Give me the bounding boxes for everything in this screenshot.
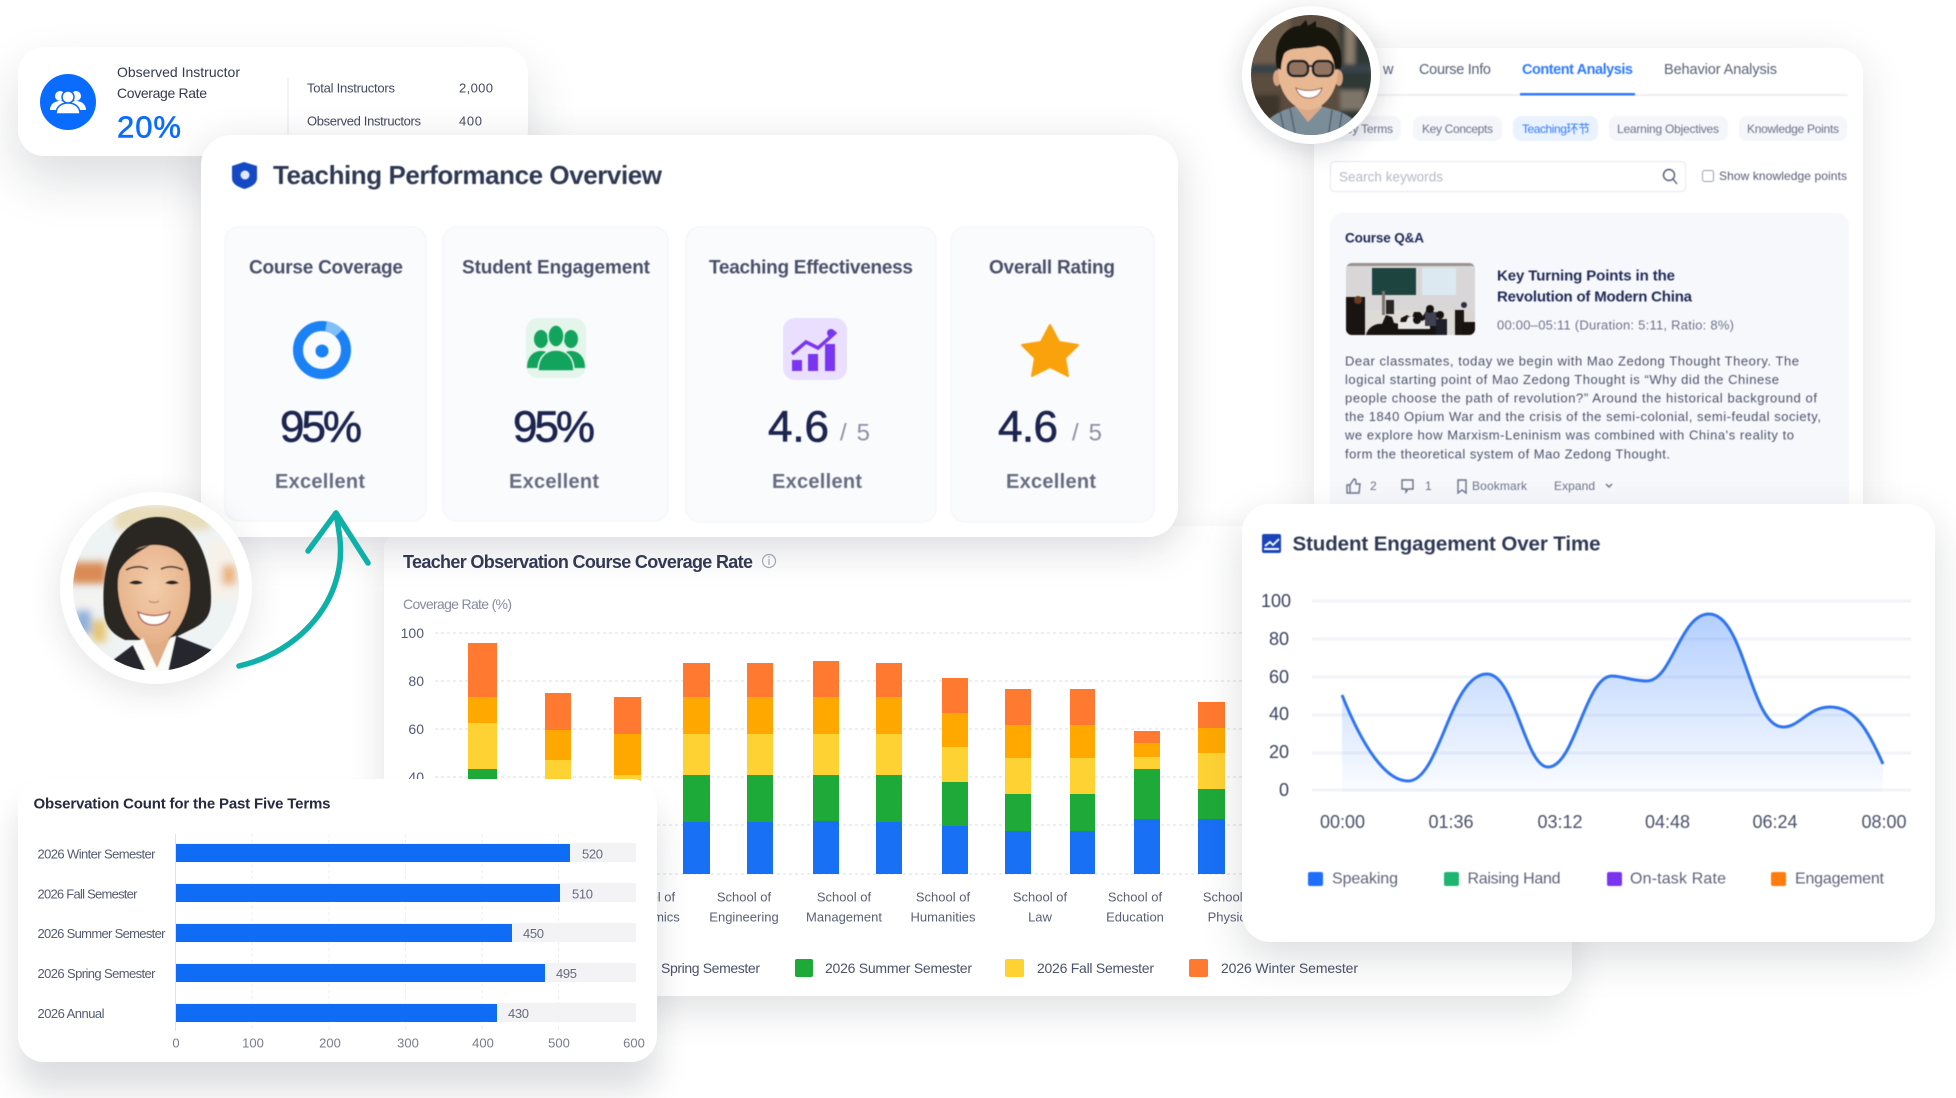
horizontal bar chart — [38, 834, 645, 1050]
chart legend: 2026 Summer Semester — [825, 960, 972, 976]
transcript paragraph: people choose the path of revolution?” Around the historical background of — [1345, 390, 1817, 406]
metric: overall rating: Excellent — [1006, 471, 1096, 493]
transcript paragraph — [1344, 354, 1821, 462]
chart title: Observation Count for the Past Five Terms — [34, 796, 330, 812]
horizontal bar chart: 430 — [508, 1006, 529, 1021]
metric: overall rating — [951, 227, 1154, 522]
stacked bar chart: School of — [916, 890, 970, 904]
navigation tabs: Course Info — [1419, 62, 1491, 78]
horizontal bar chart: 2026 Winter Semester — [38, 846, 156, 862]
stacked bar chart: School of — [621, 890, 675, 904]
chart legend — [1308, 870, 1885, 888]
panel: observed instructor coverage rate: Coverage Rate — [117, 85, 207, 101]
chart legend: Spring Semester — [661, 960, 760, 976]
area line chart: 80 — [1269, 629, 1289, 649]
action bar: 2 — [1370, 479, 1377, 493]
chart legend: On-task Rate — [1630, 870, 1726, 888]
stacked bar chart: Management — [806, 910, 882, 924]
icon: chart mosaic — [1262, 534, 1281, 553]
filter chips: Key Terms — [1338, 122, 1393, 136]
instructor counts: 2,000 — [459, 80, 493, 96]
area line chart: 100 — [1261, 591, 1291, 611]
transcript paragraph: the 1840 Opium War and the crisis of the semi-colonial, semi-feudal society, — [1345, 409, 1821, 424]
icon: shield — [232, 162, 257, 189]
transcript paragraph: logical starting point of Mao Zedong Thought is “Why did the Chinese — [1345, 372, 1779, 387]
chart legend: Speaking — [1332, 870, 1398, 888]
stacked bar chart: Physics — [1208, 910, 1253, 924]
metric: teaching effectiveness — [686, 227, 936, 522]
metric: overall rating: / 5 — [1072, 420, 1102, 446]
stacked bar chart: School of — [1013, 890, 1067, 904]
metric: overall rating: 4.6 — [998, 402, 1058, 452]
instructor counts — [307, 80, 493, 128]
metric: course coverage: Course Coverage — [249, 258, 403, 278]
horizontal bar chart: 600 — [623, 1036, 645, 1050]
area line chart — [1261, 591, 1911, 832]
panel: content analysis — [1314, 48, 1863, 518]
axis title: Coverage Rate (%) — [403, 596, 512, 612]
metric: student engagement: Student Engagement — [462, 258, 651, 278]
panel: observed instructor coverage rate — [18, 47, 528, 156]
transcript paragraph: we explore how Marxism-Leninism was combined with China's reality to — [1344, 428, 1794, 442]
search box: Search keywords — [1339, 170, 1443, 184]
area line chart: 40 — [1269, 704, 1289, 724]
area line chart: 06:24 — [1752, 812, 1798, 832]
horizontal bar chart: 200 — [319, 1036, 341, 1050]
chart legend: 2026 Winter Semester — [1221, 960, 1358, 976]
instructor counts: 400 — [459, 114, 482, 128]
horizontal bar chart: 2026 Spring Semester — [38, 966, 156, 981]
icon: star — [1022, 325, 1078, 376]
lecture title: Key Turning Points in the — [1497, 268, 1675, 284]
navigation tabs: w — [1382, 62, 1394, 78]
icon: rising chart — [783, 318, 847, 380]
stacked bar chart: Humanities — [910, 910, 976, 924]
horizontal bar chart: 520 — [582, 846, 603, 862]
metric: teaching effectiveness: Excellent — [772, 471, 862, 493]
horizontal bar chart: 300 — [397, 1036, 419, 1050]
metric: student engagement: 95% — [513, 402, 595, 452]
icon: group of students — [526, 318, 586, 378]
navigation tabs: Content Analysis — [1522, 62, 1633, 78]
panel: student engagement over time — [1242, 504, 1935, 942]
metric: teaching effectiveness: / 5 — [840, 420, 870, 446]
icon: info — [762, 554, 776, 568]
area line chart: 01:36 — [1428, 812, 1474, 832]
avatar: woman teacher — [60, 492, 252, 684]
area line chart: 08:00 — [1861, 812, 1907, 832]
arrow: teal curved arrow — [236, 510, 371, 669]
stacked bar chart: School of — [817, 890, 871, 904]
search box — [1330, 162, 1686, 192]
stacked bar chart: Engineering — [709, 910, 779, 924]
metric: course coverage: 95% — [280, 402, 362, 452]
navigation tabs: Behavior Analysis — [1664, 62, 1777, 78]
horizontal bar chart: 2026 Annual — [38, 1006, 105, 1021]
navigation tabs — [1330, 62, 1848, 96]
metric: course coverage — [225, 227, 426, 521]
area line chart: 20 — [1269, 742, 1289, 762]
stacked bar chart: 40 — [408, 769, 424, 785]
heading: Teaching Performance Overview — [273, 160, 663, 190]
stacked bar chart: Economics — [616, 910, 680, 924]
filter chips: Teaching环节 — [1522, 122, 1590, 136]
horizontal bar chart: 400 — [472, 1036, 494, 1050]
metric label: Observed Instructor — [117, 64, 240, 80]
chart legend: 2026 Fall Semester — [1037, 960, 1154, 976]
horizontal bar chart: 100 — [242, 1036, 264, 1050]
chart legend: Raising Hand — [1468, 870, 1560, 888]
transcript paragraph: Dear classmates, today we begin with Mao Zedong Thought Theory. The — [1345, 354, 1799, 368]
action bar — [1347, 479, 1612, 493]
filter chips: Knowledge Points — [1747, 122, 1839, 136]
course Q&A block — [1344, 232, 1821, 496]
area line chart: 60 — [1269, 667, 1289, 687]
horizontal bar chart: 450 — [523, 926, 544, 941]
metric: overall rating: Overall Rating — [989, 258, 1115, 278]
stacked bar chart: 100 — [401, 625, 424, 641]
action bar: 1 — [1425, 479, 1432, 493]
stacked bar chart: School of — [1108, 890, 1162, 904]
chart legend: Engagement — [1795, 870, 1885, 888]
filter chips: Learning Objectives — [1617, 122, 1719, 136]
icon: people in blue circle — [40, 74, 96, 130]
panel: teacher observation course coverage rate — [384, 526, 1572, 996]
area line chart: 03:12 — [1537, 812, 1583, 832]
instructor counts: Total Instructors — [307, 80, 396, 96]
area line chart: 0 — [1279, 780, 1289, 800]
stacked bar chart: 60 — [408, 721, 424, 737]
horizontal bar chart: 510 — [572, 886, 593, 902]
metric: teaching effectiveness: Teaching Effectiveness — [709, 258, 913, 278]
show knowledge points checkbox: Show knowledge points — [1719, 169, 1847, 183]
filter chips: Key Concepts — [1422, 122, 1493, 136]
panel: observation count for the past five terms — [18, 779, 657, 1062]
horizontal bar chart: 2026 Summer Semester — [38, 926, 166, 941]
heading: Student Engagement Over Time — [1292, 532, 1600, 556]
stacked bar chart: 80 — [408, 673, 424, 689]
panel: teaching performance overview — [201, 135, 1178, 537]
metric: student engagement: Excellent — [509, 471, 599, 493]
metric value: 20% — [117, 110, 181, 144]
classroom thumbnail — [1346, 263, 1475, 335]
metric: course coverage: Excellent — [275, 471, 365, 493]
area line chart: 04:48 — [1645, 812, 1690, 832]
metric: student engagement — [443, 227, 668, 521]
chart title: Teacher Observation Course Coverage Rate — [403, 552, 753, 572]
horizontal bar chart: 495 — [556, 966, 577, 981]
area line chart: 00:00 — [1320, 812, 1365, 832]
stacked bar chart: Education — [1106, 910, 1164, 924]
horizontal bar chart: 500 — [548, 1036, 570, 1050]
icon: coverage ring — [298, 326, 346, 374]
horizontal bar chart: 0 — [172, 1036, 180, 1050]
stacked bar chart: Law — [1028, 910, 1053, 924]
action bar: Bookmark — [1472, 479, 1528, 493]
avatar: man teacher — [1242, 6, 1380, 144]
stacked bar chart — [401, 625, 1257, 924]
lecture timing: 00:00–05:11 (Duration: 5:11, Ratio: 8%) — [1497, 318, 1734, 332]
stacked bar chart: School of — [717, 890, 771, 904]
action bar: Expand — [1554, 479, 1595, 493]
chart legend — [661, 959, 1358, 977]
heading: course Q&A: Course Q&A — [1345, 230, 1424, 246]
metric: teaching effectiveness: 4.6 — [768, 402, 829, 452]
transcript paragraph: form the theoretical system of Mao Zedong Thought. — [1345, 446, 1670, 462]
instructor counts: Observed Instructors — [307, 114, 422, 128]
filter chips — [1316, 116, 1847, 141]
course Q&A block: Revolution of Modern China — [1497, 288, 1693, 306]
stacked bar chart: School of — [1203, 890, 1257, 904]
horizontal bar chart: 2026 Fall Semester — [38, 886, 138, 902]
